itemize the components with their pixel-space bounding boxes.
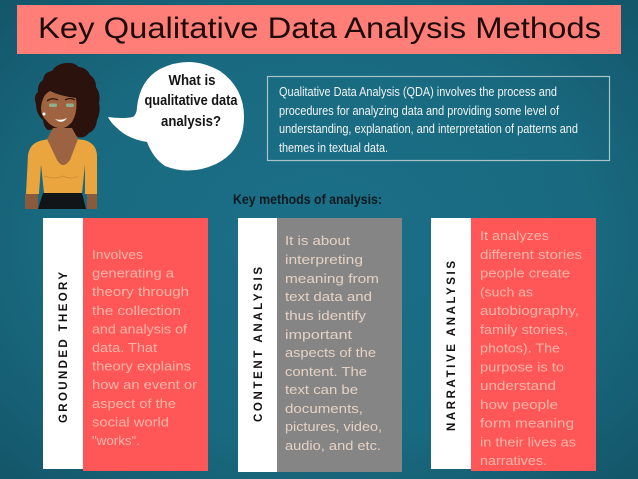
panel: grounded theory: social world [92, 414, 169, 429]
panel: content analysis: It is about [285, 233, 350, 248]
section heading: Key methods of analysis: [233, 191, 382, 207]
panel: content analysis: audio, and etc. [285, 438, 381, 453]
panel: narrative analysis: people create [480, 266, 570, 280]
QDA definition box: understanding, explanation, and interpretation of patterns and [279, 121, 578, 136]
panel: content analysis: thus identify [285, 308, 367, 323]
QDA definition box: procedures for analyzing data and providing some level of [279, 103, 559, 118]
arms and torso sweater [26, 139, 97, 194]
neckline [47, 128, 78, 165]
panel: narrative analysis: different stories [480, 247, 583, 262]
panel: narrative analysis: purpose is to [480, 359, 564, 374]
panel: content analysis: interpreting [285, 252, 363, 267]
eyes [49, 104, 57, 107]
panel: narrative analysis: form meaning [480, 416, 574, 430]
panel: grounded theory: theory through [92, 284, 189, 299]
hands [25, 194, 38, 209]
panel: narrative analysis: autobiography, [480, 303, 579, 318]
QDA definition box: themes in textual data. [279, 140, 388, 155]
speech bubble: qualitative data [144, 92, 238, 109]
panel: narrative analysis: narratives. [480, 453, 547, 468]
panel: grounded theory: generating a [92, 266, 175, 281]
panel: grounded theory: Involves [92, 247, 144, 262]
icon: woman character [25, 63, 100, 209]
panel: narrative analysis: in their lives as [480, 434, 577, 449]
panel: content analysis: pictures, video, [285, 419, 382, 434]
panel: narrative analysis: It analyzes [480, 228, 550, 243]
panel: content analysis: text can be [285, 382, 358, 397]
QDA definition box: Qualitative Data Analysis (QDA) involves the process and [279, 84, 557, 99]
panel: content analysis [238, 218, 402, 472]
speech bubble [108, 62, 244, 171]
panel: narrative analysis: how people [480, 397, 558, 412]
speech bubble: What is [168, 72, 216, 89]
panel: grounded theory: theory explains [92, 359, 192, 374]
panel: content analysis: important [285, 327, 352, 342]
panel: grounded theory: and analysis of [92, 321, 187, 336]
QDA definition box [268, 76, 610, 160]
title banner [17, 5, 621, 54]
panel: grounded theory [43, 218, 208, 471]
panel: content analysis: aspects of the [285, 345, 376, 360]
face [41, 91, 76, 128]
skirt [38, 193, 86, 209]
panel: grounded theory: "works". [92, 433, 140, 448]
panel: content analysis: content. The [285, 364, 367, 379]
panel: grounded theory: data. That [92, 340, 157, 355]
speech bubble: analysis? [161, 113, 221, 130]
panel: content analysis: documents, [285, 401, 363, 416]
hair [35, 63, 100, 138]
panel: grounded theory: how an event or [92, 377, 198, 392]
panel: narrative analysis: (such as [480, 284, 534, 299]
panel: narrative analysis: understand [480, 378, 556, 393]
panel: content analysis: text data and [285, 289, 372, 304]
title banner: Key Qualitative Data Analysis Methods [38, 12, 601, 45]
panel: grounded theory: aspect of the [92, 396, 176, 411]
panel: narrative analysis: photos). The [480, 340, 560, 356]
panel: grounded theory: GROUNDED THEORY [58, 272, 70, 423]
smile [55, 118, 67, 122]
panel: content analysis: meaning from [285, 271, 379, 286]
panel: grounded theory: the collection [92, 303, 181, 318]
panel: narrative analysis [431, 218, 596, 471]
panel: narrative analysis: family stories, [480, 322, 568, 337]
panel: content analysis: CONTENT ANALYSIS [253, 267, 265, 422]
panel: narrative analysis: NARRATIVE ANALYSIS [446, 261, 458, 431]
